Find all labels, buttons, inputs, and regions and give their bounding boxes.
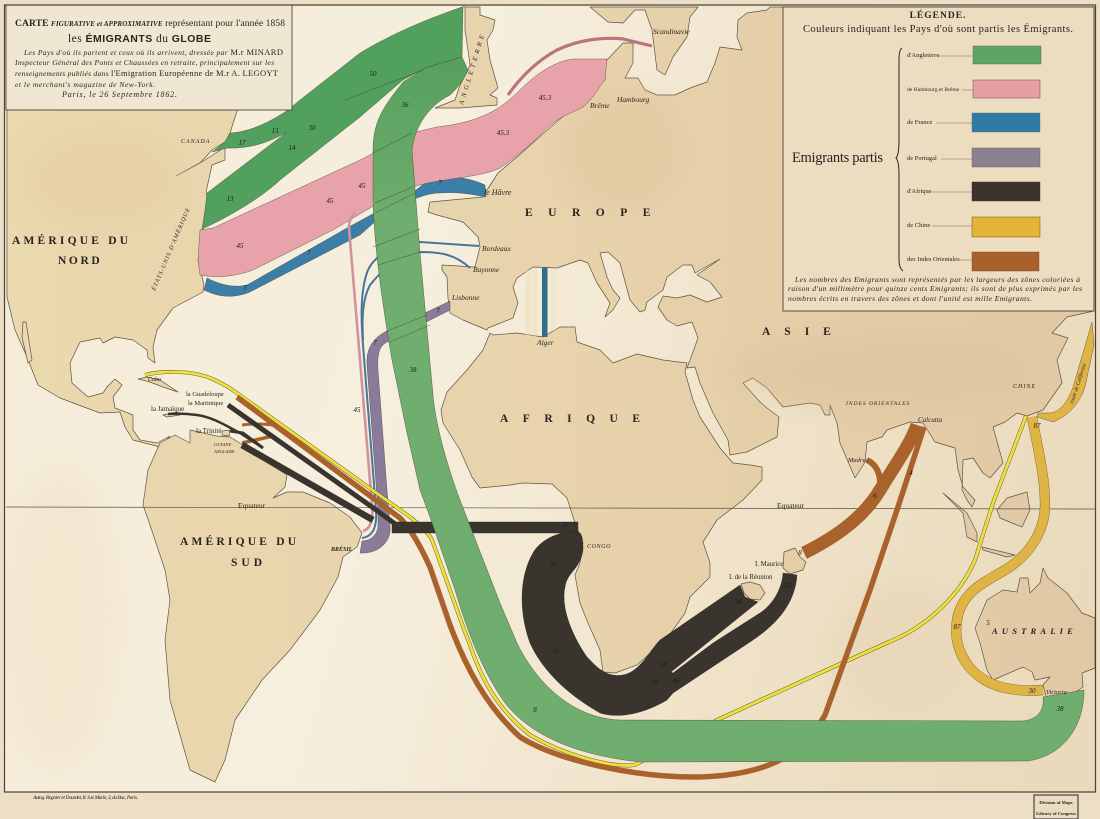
legend note: raison d'un millimètre pour quinze cents Emigrants; ils sont de plus exprimés par les [788,284,1082,293]
land: Mauritius island [783,548,806,574]
stripes behind the Algiers route [525,268,556,336]
place names: Equateur [238,501,266,510]
numbers written across the flows: 27 [562,521,569,529]
numbers written across the flows: 22 [784,582,791,590]
numbers written across the flows [226,70,1064,714]
place names: Brême [590,101,610,110]
place names: ANGLETERRE [458,31,487,107]
place names: Scandinavie [653,27,690,36]
legend rows: de Portugal [907,155,937,162]
legend rows: d'Afrique [907,188,932,195]
numbers written across the flows: 45 [358,182,366,190]
land: North and Central America [7,108,238,447]
land: Cuba [138,377,178,392]
numbers written across the flows: 13 [226,195,234,203]
legend brace [896,48,903,271]
place names: Equateur [777,501,805,510]
flow: Portugal to Brazil (purple) [360,301,450,553]
land: Great Britain [435,7,498,108]
numbers written across the flows: 16 [672,677,680,685]
lithographer credit: Autog. Regnier et Dourdet, R. S.te Marie, 3, du Bac, Paris. [32,795,138,801]
numbers written across the flows: 87 [954,623,961,631]
flow: China to Antilles (yellow) [145,372,1026,765]
numbers written across the flows: 38 [1056,705,1064,713]
legend heading: LÉGENDE. [910,9,966,21]
description: Les Pays d'où ils partent et ceux où ils arrivent, dressée par M.r MINARD [23,47,283,57]
continent names: NORD [58,255,102,267]
land: Scandinavia [590,7,698,75]
continent names: AFRIQUE [500,413,655,425]
title line: CARTE FIGURATIVE et APPROXIMATIVE représentant pour l'année 1858 [15,19,285,29]
place names: Bayonne [473,265,500,274]
legend note: Les nombres des Emigrants sont représentés par les largeurs des zônes coloriées à [794,275,1080,284]
land: Reunion island [741,582,765,600]
legend rows: de France [907,119,933,126]
numbers written across the flows: 50 [370,70,377,78]
continent names: SUD [231,557,266,569]
flow: Hamburg and Bremen (pink) [198,59,607,277]
numbers written across the flows: 45 [236,242,244,250]
description: Inspecteur Général des Ponts et Chaussées en retraite, principalement sur les [14,58,274,67]
continent names: ASIE [762,326,845,338]
numbers written across the flows: 6 [873,492,877,500]
numbers written across the flows: 8 [798,549,802,557]
numbers written across the flows: 4 [909,469,913,477]
flow: East Indies to Antilles (brown long route) [237,397,924,777]
numbers written across the flows: 39 [650,679,659,687]
numbers written across the flows: 38 [408,366,417,374]
title box [6,5,292,110]
flow: Africa to the Antilles (black lines) [168,405,398,526]
land: Eurasia [428,7,1094,507]
legend note: nombres écrits en travers des zônes et dont l'unité est mille Emigrants. [788,294,1032,303]
description [14,47,283,99]
numbers written across the flows: 36 [400,101,409,109]
place names: Hambourg [616,95,649,104]
place names: I. de la Réunion [729,574,773,581]
place names: CHINE [1013,384,1036,390]
numbers written across the flows: 39 [548,561,557,569]
numbers written across the flows: 14 [288,144,296,152]
flow: England to Canada and USA [202,6,465,229]
library stamp [1034,795,1078,819]
legend note [788,275,1082,303]
place names: Victoria [1046,689,1067,696]
numbers written across the flows: 45.3 [539,94,552,102]
place names: Lisbonne [451,293,480,302]
place names: CONGO [587,544,611,550]
place names: Cuba [148,377,161,383]
place names: ÉTATS-UNIS D'AMÉRIQUE [149,206,192,293]
equator line [6,507,1095,509]
numbers written across the flows: 24 [660,661,667,669]
place names: GUYANE [214,442,231,447]
flow: China to Australia (gold) [956,417,1045,691]
place names: le Hâvre [484,188,512,197]
place names: Madras [847,457,869,464]
numbers written across the flows: 45 [354,406,361,414]
numbers written across the flows: 30 [1028,687,1036,695]
numbers written across the flows: 30 [308,124,316,132]
land: Australia [975,568,1095,700]
flow: France to Bordeaux and Bayonne (thin blue) [362,242,479,538]
place names: la Jamaïque [151,405,184,413]
place names [148,27,1088,696]
legend rows: des Indes Orientales [907,256,960,263]
numbers written across the flows: 17 [238,139,246,147]
place names: Bordeaux [482,244,512,253]
numbers written across the flows: 7 [373,339,377,347]
flow: Africa to Reunion and Mauritius (black band) [392,522,797,715]
numbers written across the flows: 8 [533,706,537,714]
tonal paper stains [0,90,1030,770]
continent names: EUROPE [525,207,666,219]
description: Paris, le 26 Septembre 1862. [61,90,177,99]
flow: France to Le Havre (blue) [204,177,486,296]
land: South America [143,430,362,782]
numbers written across the flows: 7 [307,249,311,257]
flows: England to America and Africa/Australia (green) [202,6,1084,762]
place names: la Guadeloupe [186,391,224,398]
flow: China to California (gold) [1037,322,1094,422]
place names: ANGLAISE [213,449,235,454]
legend rows: d'Angleterre [907,52,939,59]
place names: Alger [536,338,554,347]
continent names: AMÉRIQUE DU [12,233,131,247]
flow: England to Australia [373,57,1084,762]
library stamp: Division of Maps [1039,800,1073,805]
numbers written across the flows: 7 [436,307,440,315]
land: Sumatra [943,493,977,542]
legend rows [907,46,1041,271]
numbers written across the flows: 24 [734,598,742,606]
land: Trinidad [222,430,230,436]
continent names [12,207,1077,636]
numbers written across the flows: 5 [986,619,990,627]
place names: la Trinité [196,427,221,435]
place names: route de Californie [1068,362,1088,405]
land: Baja California [22,322,32,363]
land: Borneo [997,492,1030,527]
numbers written across the flows: 13 [272,127,279,135]
legend side label: Emigrants partis [792,150,883,166]
numbers written across the flows: 87 [1034,422,1041,430]
place names: Calcutta [918,416,943,424]
legend subtitle: Couleurs indiquant les Pays d'où sont partis les Émigrants. [803,23,1073,35]
place names: la Martinique [188,400,223,407]
land: Java [982,547,1015,557]
crossing lines over green [345,70,430,342]
library stamp: Library of Congress [1036,811,1076,816]
numbers written across the flows: 45 [326,197,334,205]
legend rows: de Chine [907,222,930,229]
numbers written across the flows: 45.3 [497,129,510,137]
description: renseignements publiés dans l'Emigration Européenne de M.r A. LEGOYT [15,68,279,78]
land: Africa [441,327,762,673]
flow: France to Algiers (blue vertical) [542,267,548,337]
place names: CANADA [181,139,210,145]
place names: INDES ORIENTALES [845,401,910,407]
subtitle: les ÉMIGRANTS du GLOBE [68,32,211,45]
flow: Calcutta to Mauritius and Madras (brown) [804,425,917,553]
numbers written across the flows: 7 [243,284,247,292]
continent names: AMÉRIQUE DU [180,534,299,548]
flow: Hamburg to Scandinavia (thin pink) [508,38,652,95]
flow: Hamburg to Brazil (thin pink) [349,213,372,531]
land: Jamaica [163,412,180,417]
legend rows: de Hambourg et Brême [907,87,960,93]
numbers written across the flows: 7 [438,179,442,187]
continent names: AUSTRALIE [991,626,1077,636]
numbers written across the flows: 39 [552,648,560,656]
legend panel [783,7,1094,311]
place names: BRÉSIL [330,545,353,553]
place names: I. Maurice [755,561,783,568]
description: et le merchant's magazine de New-York. [15,80,155,89]
